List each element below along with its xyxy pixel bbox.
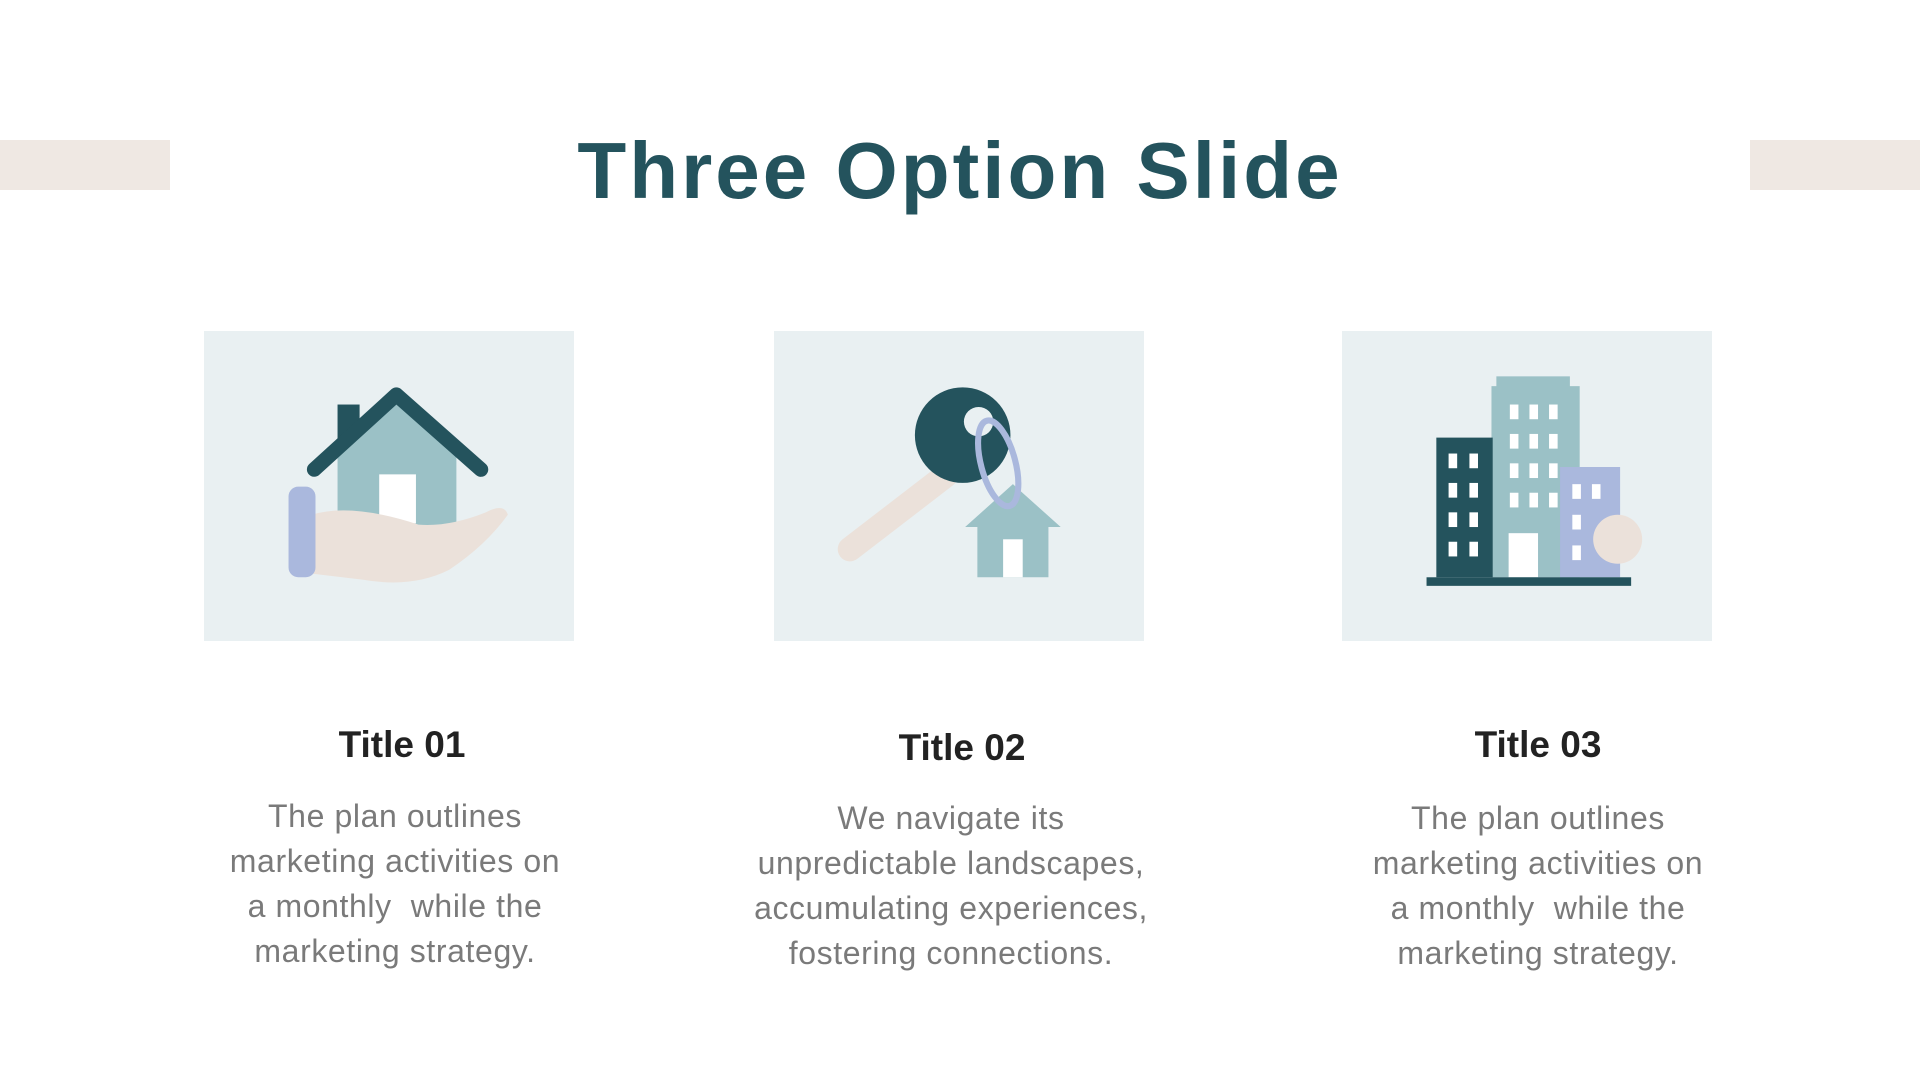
column 2 text [754, 727, 1148, 971]
panel: buildings icon [1342, 331, 1712, 641]
column 3 text: a monthly while the [1391, 890, 1685, 926]
title: Three Option Slide [577, 126, 1343, 215]
column 3 text: marketing strategy. [1397, 935, 1679, 971]
column 2 text: unpredictable landscapes, [758, 845, 1144, 881]
column 1 text: a monthly while the [248, 888, 542, 924]
column 3 text: The plan outlines [1411, 800, 1665, 836]
column 1 text: Title 01 [339, 724, 465, 765]
panel: key icon [774, 331, 1144, 641]
column 2 text: Title 02 [899, 727, 1025, 768]
column 3 text [1373, 724, 1703, 971]
column 2 text: We navigate its [837, 800, 1065, 836]
column 1 text: marketing strategy. [254, 933, 536, 969]
column 1 text: marketing activities on [230, 843, 560, 879]
column 1 text: The plan outlines [268, 798, 522, 834]
column 3 text: marketing activities on [1373, 845, 1703, 881]
column 2 text: accumulating experiences, [754, 890, 1148, 926]
column 2 text: fostering connections. [789, 935, 1113, 971]
decorative bar left [0, 140, 170, 190]
column 3 text: Title 03 [1475, 724, 1601, 765]
decorative bar right [1750, 140, 1920, 190]
panel: house icon [204, 331, 574, 641]
column 1 text [230, 724, 560, 969]
